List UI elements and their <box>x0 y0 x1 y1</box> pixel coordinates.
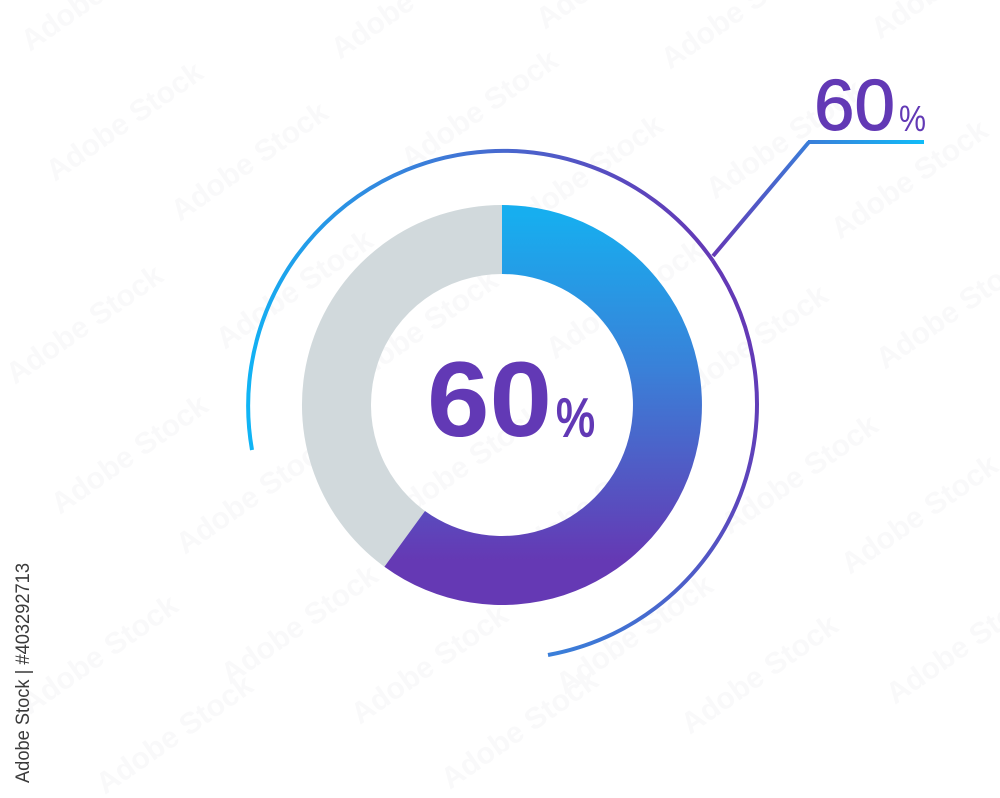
watermark pattern: Adobe Stock <box>505 438 674 571</box>
watermark pattern: Adobe Stock <box>715 408 884 541</box>
donut chart <box>302 205 702 605</box>
watermark pattern: Adobe Stock <box>15 588 184 721</box>
watermark pattern: Adobe Stock <box>835 448 1000 581</box>
leader line <box>713 142 924 256</box>
watermark pattern: Adobe Stock <box>665 278 834 411</box>
watermark pattern: Adobe Stock <box>45 388 214 521</box>
watermark pattern: Adobe Stock <box>170 428 339 561</box>
watermark pattern: Adobe Stock <box>675 608 844 741</box>
watermark pattern: Adobe Stock <box>165 95 334 228</box>
watermark pattern: Adobe Stock <box>550 568 719 701</box>
watermark pattern: Adobe Stock <box>215 558 384 691</box>
callout label: 60%: % <box>899 98 926 139</box>
watermark pattern: Adobe Stock <box>825 113 994 246</box>
watermark pattern: Adobe Stock <box>380 398 549 531</box>
stock credit: Adobe Stock | #403292713 <box>12 563 34 783</box>
watermark pattern: Adobe Stock <box>500 108 669 241</box>
center label: 60%: % <box>556 388 595 448</box>
watermark pattern: Adobe Stock <box>210 223 379 356</box>
watermark pattern: Adobe Stock <box>700 73 869 206</box>
outer gradient arc <box>248 151 757 655</box>
watermark pattern: Adobe Stock <box>540 233 709 366</box>
donut segment: remaining 40% <box>302 205 502 567</box>
watermark pattern: Adobe Stock <box>0 258 169 391</box>
center label: 60%: 60 <box>427 339 552 459</box>
watermark pattern: Adobe Stock <box>345 598 514 731</box>
watermark pattern: Adobe Stock <box>435 663 604 796</box>
watermark pattern: Adobe Stock <box>90 668 259 798</box>
callout label: 60%: 60 <box>814 66 895 146</box>
watermark pattern: Adobe Stock <box>40 55 209 188</box>
watermark pattern: Adobe Stock <box>335 263 504 396</box>
watermark pattern: Adobe Stock <box>395 43 564 176</box>
donut segment: 60% <box>384 205 702 605</box>
